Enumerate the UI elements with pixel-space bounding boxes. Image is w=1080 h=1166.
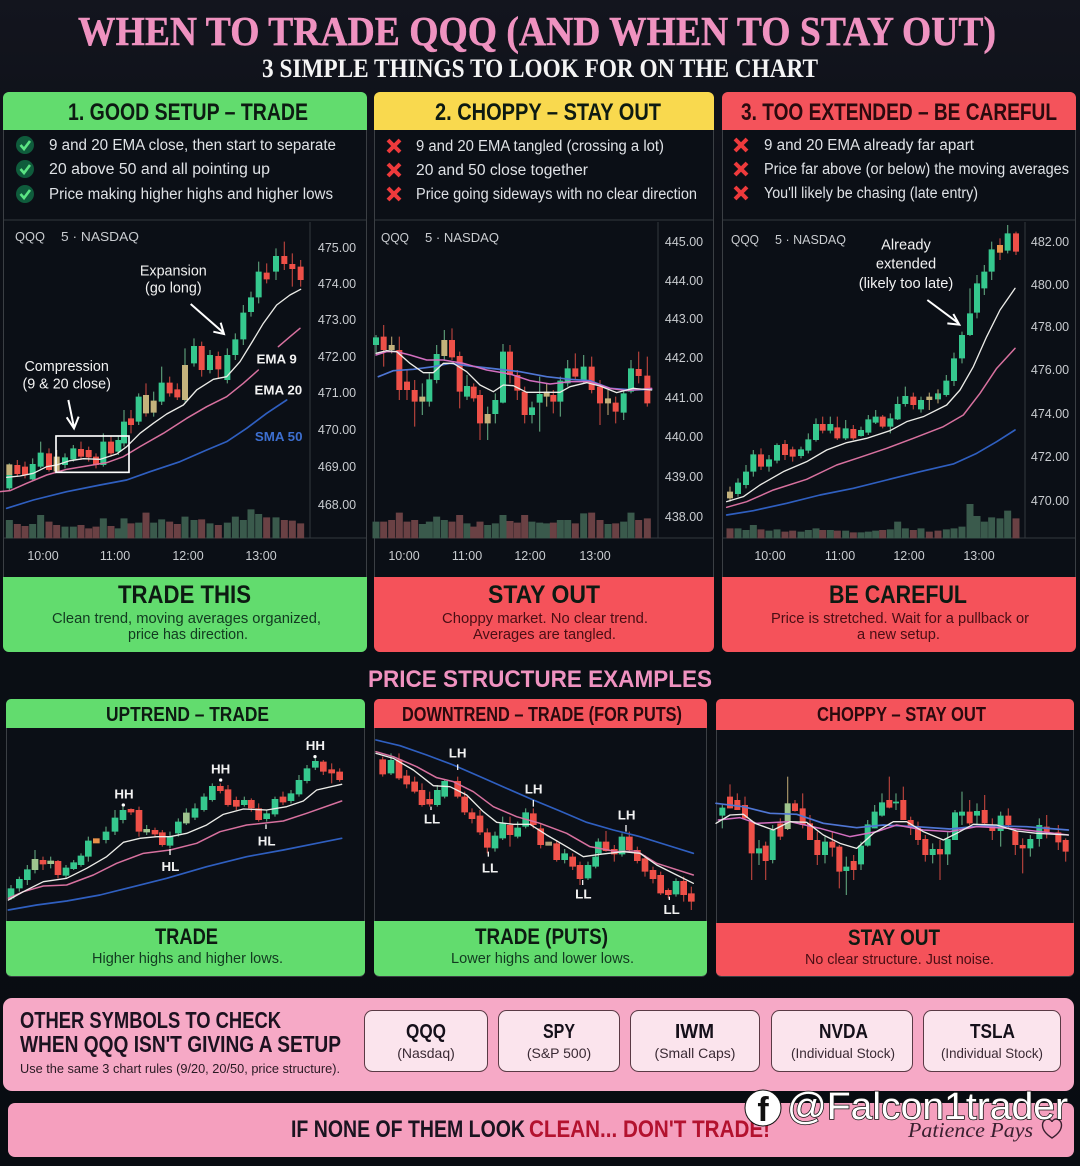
verdict: trade puts xyxy=(374,921,707,976)
verdict: trade xyxy=(6,921,365,976)
verdict: trade this xyxy=(3,577,367,652)
verdict: stay out example: STAY OUT xyxy=(848,925,940,950)
verdict: be careful xyxy=(722,577,1076,652)
chart: too extended: 478.00 xyxy=(1031,320,1069,334)
header: choppy: 2. CHOPPY – STAY OUT xyxy=(435,99,661,126)
verdict: be careful: a new setup. xyxy=(857,627,940,643)
swing labels: HH xyxy=(306,738,325,753)
swing labels: LL xyxy=(482,860,498,875)
chart: too extended: 13:00 xyxy=(963,549,995,563)
checklist: too extended: Price far above (or below) the moving averages xyxy=(764,161,1069,178)
symbol: QQQ xyxy=(364,1010,488,1072)
chart: uptrend xyxy=(8,738,342,910)
compression box xyxy=(56,436,129,472)
swing labels: LL xyxy=(664,902,680,917)
chart: choppy: 438.00 xyxy=(665,510,703,524)
chart: too extended: 12:00 xyxy=(893,549,925,563)
verdict: stay out example: No clear structure. Just noise. xyxy=(805,952,994,968)
banner: don't trade: IF NONE OF THEM LOOK xyxy=(291,1116,526,1143)
chart: choppy: 444.00 xyxy=(665,274,703,288)
chart: choppy: 443.00 xyxy=(665,312,703,326)
panel: choppy xyxy=(374,92,714,652)
checklist: good setup: Price making higher highs and higher lows xyxy=(49,186,333,203)
panel: choppy example xyxy=(716,699,1074,976)
verdict: trade puts: TRADE (PUTS) xyxy=(475,924,608,949)
chart: good setup: 12:00 xyxy=(172,549,204,563)
subtitle: 3 SIMPLE THINGS TO LOOK FOR ON THE CHART xyxy=(262,54,818,83)
heading: other symbols: OTHER SYMBOLS TO CHECK xyxy=(20,1007,281,1033)
swing labels: LL xyxy=(575,887,591,902)
panel: too extended xyxy=(722,92,1076,652)
chart: choppy: 12:00 xyxy=(514,549,546,563)
swing labels: LH xyxy=(525,782,543,797)
swing labels: LH xyxy=(618,808,636,823)
verdict: stay out: Averages are tangled. xyxy=(473,627,616,643)
chart: too extended: 10:00 xyxy=(754,549,786,563)
symbol: SPY xyxy=(498,1010,620,1072)
label: already extended: (likely too late) xyxy=(859,276,953,292)
swing labels: LH xyxy=(449,746,467,761)
chart: choppy: 11:00 xyxy=(452,549,482,563)
header: choppy example xyxy=(716,699,1074,730)
chart: good setup: 475.00 xyxy=(318,241,356,255)
chart: too extended: 482.00 xyxy=(1031,235,1069,249)
checklist: choppy: Price going sideways with no clear direction xyxy=(416,186,697,203)
heading: other symbols xyxy=(20,1007,341,1057)
banner: don't trade xyxy=(8,1103,1074,1157)
chart: good setup: 472.00 xyxy=(318,350,356,364)
symbol: TSLA xyxy=(924,1010,1060,1072)
chart: too extended: 476.00 xyxy=(1031,363,1069,377)
swing labels: HL xyxy=(161,859,179,874)
verdict: stay out: Choppy market. No clear trend. xyxy=(442,611,648,627)
swing labels: LL xyxy=(424,812,440,827)
chart: good setup: 11:00 xyxy=(100,549,130,563)
verdict: trade: Higher highs and higher lows. xyxy=(92,951,283,967)
chart: good setup: 5 · NASDAQ xyxy=(61,229,139,244)
label: EMA 9: EMA 9 xyxy=(257,352,297,367)
label: already extended: Already xyxy=(881,238,932,254)
chart: choppy: 442.00 xyxy=(665,351,703,365)
symbol: QQQ: QQQ xyxy=(406,1021,446,1043)
verdict: trade this: price has direction. xyxy=(128,627,248,643)
verdict: trade puts: Lower highs and lower lows. xyxy=(451,951,634,967)
title: WHEN TO TRADE QQQ (AND WHEN TO STAY OUT) xyxy=(78,8,996,54)
chart: choppy: 445.00 xyxy=(665,235,703,249)
header: uptrend xyxy=(6,699,365,728)
verdict: stay out xyxy=(374,577,714,652)
chart: downtrend xyxy=(376,740,693,917)
chart: good setup: QQQ xyxy=(15,229,45,244)
chart: choppy: QQQ xyxy=(381,230,409,245)
banner: other symbols xyxy=(3,998,1074,1091)
checklist: too extended xyxy=(735,137,1069,202)
checklist: good setup xyxy=(16,136,336,203)
header: uptrend: UPTREND – TRADE xyxy=(106,704,269,726)
chart: good setup xyxy=(0,220,366,563)
header: too extended xyxy=(722,92,1076,130)
chart: choppy xyxy=(375,220,713,563)
symbol: IWM xyxy=(630,1010,760,1072)
panel: downtrend xyxy=(374,699,707,976)
banner: don't trade: CLEAN... DON'T TRADE! xyxy=(529,1116,770,1143)
verdict: stay out: STAY OUT xyxy=(488,581,600,609)
symbol: SPY: SPY xyxy=(543,1021,576,1043)
label: compression: Compression xyxy=(24,359,109,375)
chart: choppy example xyxy=(716,777,1068,895)
heading: other symbols: WHEN QQQ ISN'T GIVING A SETUP xyxy=(20,1031,341,1057)
symbol: QQQ: (Nasdaq) xyxy=(397,1045,455,1061)
header: downtrend: DOWNTREND – TRADE (FOR PUTS) xyxy=(402,704,682,726)
symbol: IWM: (Small Caps) xyxy=(655,1045,735,1061)
label: EMA 20: EMA 20 xyxy=(255,383,302,398)
arrow: already extended xyxy=(927,300,959,325)
chart: too extended xyxy=(723,220,1075,563)
header: good setup: 1. GOOD SETUP – TRADE xyxy=(68,99,308,126)
label: expansion: Expansion xyxy=(140,264,207,280)
verdict: trade: TRADE xyxy=(155,924,218,949)
swing labels: HH xyxy=(211,761,230,776)
checklist: choppy: 20 and 50 close together xyxy=(416,162,588,179)
verdict: be careful: BE CAREFUL xyxy=(829,581,967,609)
label: compression: (9 & 20 close) xyxy=(22,376,111,392)
label: SMA 50: SMA 50 xyxy=(255,429,302,444)
chart: too extended: 11:00 xyxy=(825,549,855,563)
symbol: TSLA: (Individual Stock) xyxy=(941,1045,1043,1061)
symbol: NVDA xyxy=(772,1010,912,1072)
symbol: NVDA: (Individual Stock) xyxy=(791,1045,895,1061)
checklist: too extended: 9 and 20 EMA already far apart xyxy=(764,137,975,154)
signature: patience pays: Patience Pays xyxy=(907,1118,1033,1142)
arrow: compression xyxy=(67,400,79,428)
chart: choppy: 5 · NASDAQ xyxy=(425,230,499,245)
checklist: choppy: 9 and 20 EMA tangled (crossing a lot) xyxy=(416,138,664,155)
chart: good setup: 10:00 xyxy=(27,549,59,563)
chart: good setup: 13:00 xyxy=(245,549,277,563)
chart: good setup: 469.00 xyxy=(318,460,356,474)
panel: good setup xyxy=(0,92,367,652)
note: chart rules: Use the same 3 chart rules (9/20, 20/50, price structure). xyxy=(20,1062,340,1076)
chart: choppy: 439.00 xyxy=(665,470,703,484)
header: choppy example: CHOPPY – STAY OUT xyxy=(817,704,986,726)
verdict: trade this: TRADE THIS xyxy=(118,581,251,609)
chart: choppy: 440.00 xyxy=(665,430,703,444)
chart: good setup: 474.00 xyxy=(318,277,356,291)
symbol: TSLA: TSLA xyxy=(970,1021,1015,1043)
verdict: trade this: Clean trend, moving averages organized, xyxy=(52,611,321,627)
header: choppy xyxy=(374,92,714,130)
chart: good setup: 471.00 xyxy=(318,386,356,400)
checklist: good setup: 20 above 50 and all pointing up xyxy=(49,161,270,178)
checklist: too extended: You'll likely be chasing (late entry) xyxy=(764,185,978,202)
chart: too extended: QQQ xyxy=(731,232,759,247)
label: already extended: extended xyxy=(876,257,936,273)
chart: good setup: 470.00 xyxy=(318,423,356,437)
chart: good setup: 468.00 xyxy=(318,498,356,512)
chart: too extended: 5 · NASDAQ xyxy=(775,232,846,247)
chart: too extended: 470.00 xyxy=(1031,494,1069,508)
arrow: expansion xyxy=(191,304,224,334)
chart: choppy: 441.00 xyxy=(665,391,703,405)
header: downtrend xyxy=(374,699,707,728)
swing labels: HL xyxy=(258,834,276,849)
verdict: stay out example xyxy=(716,923,1074,976)
verdict: be careful: Price is stretched. Wait for a pullback or xyxy=(771,611,1029,627)
checklist: good setup: 9 and 20 EMA close, then start to separate xyxy=(49,137,336,154)
watermark: facebook handle: f xyxy=(757,1091,769,1129)
panel: uptrend xyxy=(6,699,365,976)
chart: choppy: 13:00 xyxy=(579,549,611,563)
symbol: IWM: IWM xyxy=(675,1021,714,1043)
chart: choppy: 10:00 xyxy=(388,549,420,563)
symbol: SPY: (S&P 500) xyxy=(527,1045,591,1061)
chart: good setup: 473.00 xyxy=(318,313,356,327)
checklist: choppy xyxy=(388,138,697,203)
chart: too extended: 474.00 xyxy=(1031,407,1069,421)
header: good setup xyxy=(3,92,367,130)
chart: too extended: 472.00 xyxy=(1031,450,1069,464)
symbol: NVDA: NVDA xyxy=(819,1021,868,1043)
watermark: facebook handle: @Falcon1trader xyxy=(787,1086,1068,1128)
chart: too extended: 480.00 xyxy=(1031,278,1069,292)
label: expansion: (go long) xyxy=(145,280,202,296)
swing labels: HH xyxy=(114,786,134,801)
heading: price structure examples: PRICE STRUCTURE EXAMPLES xyxy=(368,666,712,693)
